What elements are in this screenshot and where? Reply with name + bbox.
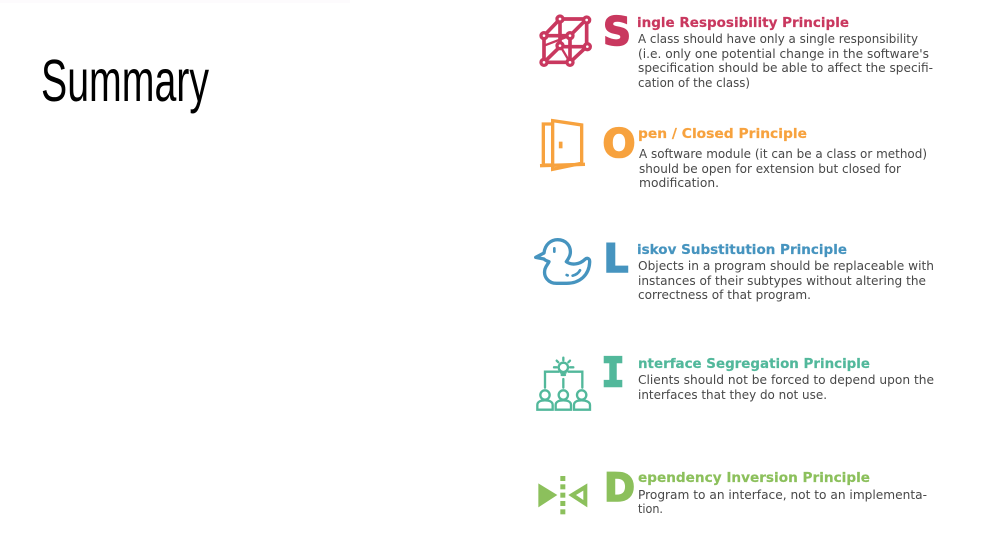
title: Summary (41, 48, 209, 114)
heading: pen / Closed Principle (638, 126, 807, 142)
panel: liskov substitution principle (536, 237, 934, 302)
description: (i.e. only one potential change in the software's (638, 46, 929, 61)
description (638, 31, 933, 90)
letter D: D (604, 466, 635, 511)
description: instances of their subtypes without altering the (638, 273, 926, 288)
description (638, 487, 927, 516)
description: Program to an interface, not to an implementa- (638, 487, 927, 502)
description: modification. (639, 175, 719, 190)
letter S: S (603, 10, 631, 55)
letter L: L (604, 237, 628, 282)
description: tion. (638, 501, 663, 516)
description: correctness of that program. (638, 287, 811, 302)
description (639, 146, 927, 190)
description: specification should be able to affect the specifi- (638, 60, 933, 75)
heading: ingle Resposibility Principle (637, 15, 849, 31)
icon: team and light bulb (537, 358, 590, 410)
panel: open closed principle (540, 121, 927, 190)
description (638, 258, 934, 302)
icon: rubber duck (536, 240, 590, 283)
heading: nterface Segregation Principle (638, 356, 870, 372)
panel: interface segregation principle (537, 350, 934, 410)
letter I: I (602, 350, 624, 400)
description: A class should have only a single responsibility (638, 31, 919, 46)
panel: single responsibility principle (541, 10, 933, 90)
description: A software module (it can be a class or method) (639, 146, 927, 161)
icon: network cube (541, 16, 590, 65)
heading: iskov Substitution Principle (637, 242, 847, 258)
description: Objects in a program should be replaceable with (638, 258, 934, 273)
heading: ependency Inversion Principle (638, 470, 870, 486)
letter O: O (602, 122, 636, 167)
description: cation of the class) (638, 75, 750, 90)
description (638, 372, 934, 402)
icon: open door (540, 121, 585, 169)
panel: dependency inversion principle (538, 466, 927, 516)
description: should be open for extension but closed for (639, 161, 902, 176)
description: Clients should not be forced to depend upon the (638, 372, 934, 387)
description: interfaces that they do not use. (638, 387, 827, 402)
icon: mirrored triangles (538, 476, 587, 514)
